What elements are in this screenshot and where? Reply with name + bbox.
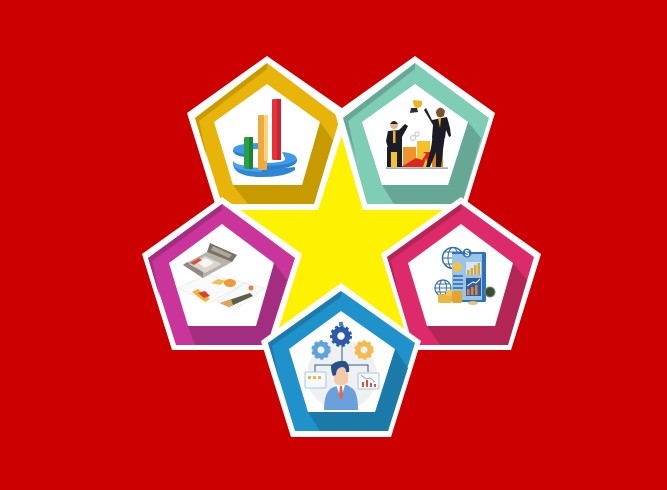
icon: manager with gears and charts — [305, 322, 379, 410]
panel: pink pentagon with finance report — [381, 197, 541, 350]
panel: teal pentagon with businessmen and trophy — [335, 56, 495, 210]
icon: finance report with globes and coins: $ — [465, 249, 470, 258]
icon: businessmen celebrating on bars with trophy — [386, 100, 451, 169]
icon: 3D bar chart on blue rings — [233, 99, 297, 177]
panel: blue pentagon with manager and gears — [261, 283, 421, 437]
panel: gold pentagon with 3D bar chart — [187, 56, 349, 210]
icon: calculator and financial papers — [178, 243, 265, 310]
yellow star — [232, 125, 450, 335]
icon: finance report with globes and coins — [435, 248, 495, 305]
panel: magenta pentagon with calculator and reports — [142, 197, 302, 350]
